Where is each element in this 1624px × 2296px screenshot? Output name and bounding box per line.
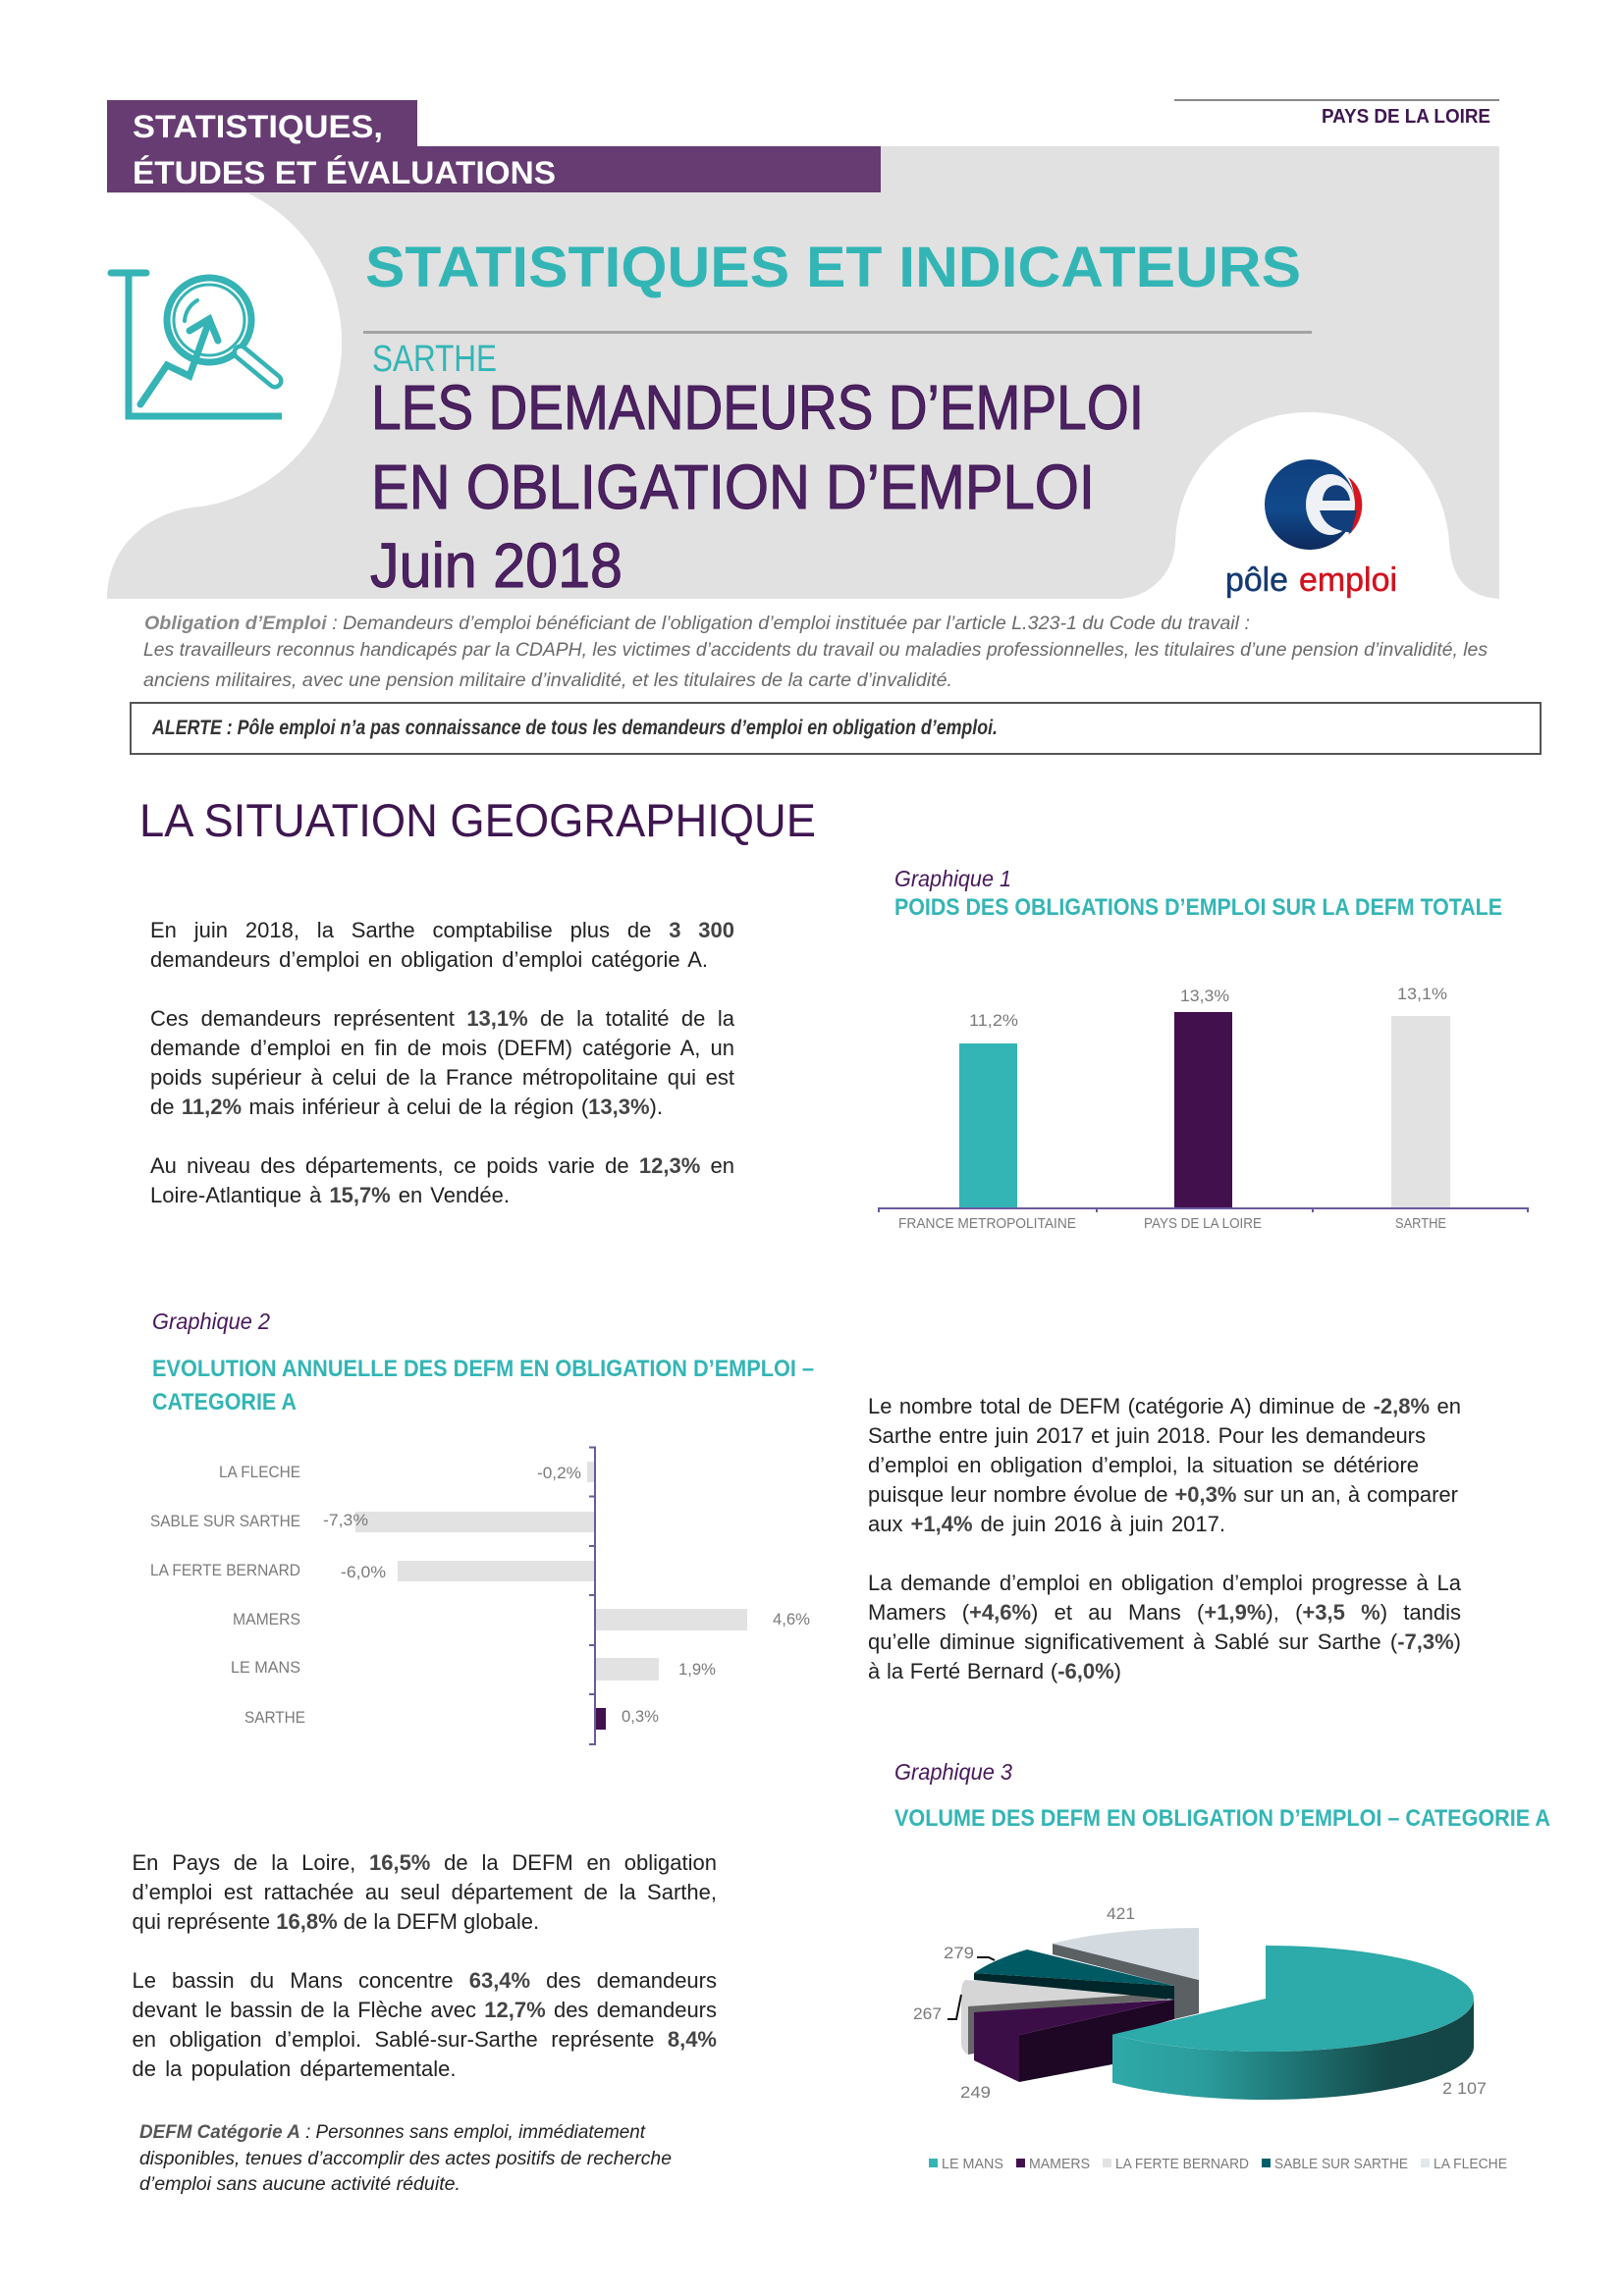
- chart heading: graphique 1: Graphique 1: [894, 866, 1011, 891]
- text block: situation: de 11,2% mais inférieur à celui de la région (13,3%).: [150, 1095, 663, 1119]
- bar chart: evolution annuelle: 1,9%: [678, 1660, 716, 1679]
- slice: la ferte bernard: [961, 1980, 1167, 2055]
- pie values: 2 107: [1442, 2079, 1487, 2098]
- bar chart: poids des obligations d'emploi: 13,1%: [1397, 985, 1447, 1003]
- text block: pays de la loire: devant le bassin de la Flèche avec 12,7% des demandeurs: [132, 1998, 717, 2022]
- definition: obligation d'emploi: Les travailleurs reconnus handicapés par la CDAPH, les victimes d’accidents du travail ou maladies professionnelles, les titulaires d’une pension d’invalidité, les: [143, 640, 1489, 661]
- slice: la fleche: [1053, 1928, 1199, 2019]
- definition: obligation d'emploi: [143, 614, 1489, 691]
- bar chart: poids des obligations d'emploi: [879, 985, 1528, 1232]
- bar chart: poids des obligations d'emploi: PAYS DE LA LOIRE: [1144, 1215, 1262, 1232]
- text block: evolution: puisque leur nombre évolue de +0,3% sur un an, à comparer: [868, 1482, 1458, 1507]
- alert box: [131, 703, 1541, 754]
- bar chart: evolution annuelle: 4,6%: [773, 1610, 810, 1629]
- top-right rule and region label: PAYS DE LA LOIRE: [1322, 106, 1490, 128]
- icon: chart with magnifying glass: [111, 273, 282, 416]
- bar chart: evolution annuelle: -6,0%: [341, 1563, 386, 1581]
- text block: evolution: d’emploi en obligation d’emploi, la situation se détériore: [868, 1453, 1419, 1477]
- text block: evolution: Mamers (+4,6%) et au Mans (+1,9%), (+3,5 %) tandis: [868, 1600, 1461, 1625]
- purple publication tag: STATISTIQUES,: [133, 109, 383, 144]
- text block: evolution: Le nombre total de DEFM (catégorie A) diminue de -2,8% en: [868, 1394, 1461, 1418]
- legend: [929, 2156, 1507, 2172]
- chart heading: graphique 1: POIDS DES OBLIGATIONS D’EMPLOI SUR LA DEFM TOTALE: [894, 894, 1502, 921]
- legend: LA FERTE BERNARD: [1115, 2156, 1249, 2172]
- title: statistiques et indicateurs: STATISTIQUES ET INDICATEURS: [365, 236, 1301, 299]
- text block: evolution: [868, 1394, 1461, 1683]
- text block: pays de la loire: d’emploi est rattachée au seul département de la Sarthe,: [132, 1880, 717, 1904]
- bar chart: poids des obligations d'emploi: 13,3%: [1180, 987, 1229, 1005]
- bar chart: evolution annuelle: [150, 1447, 810, 1744]
- text block: evolution: La demande d’emploi en obligation d’emploi progresse à La: [868, 1571, 1461, 1595]
- slice: sable sur sarthe: [974, 1949, 1174, 2000]
- definition: DEFM categorie A: disponibles, tenues d’accomplir des actes positifs de recherche: [139, 2149, 672, 2169]
- pie values: 421: [1107, 1904, 1135, 1923]
- bar chart: poids des obligations d'emploi: 11,2%: [969, 1011, 1018, 1030]
- chart heading: graphique 3: Graphique 3: [894, 1759, 1012, 1785]
- chart heading: graphique 2: CATEGORIE A: [152, 1389, 297, 1415]
- bar chart: evolution annuelle: MAMERS: [233, 1610, 300, 1629]
- text block: pays de la loire: qui représente 16,8% de la DEFM globale.: [132, 1909, 539, 1934]
- chart heading: graphique 3: [894, 1759, 1550, 1832]
- bar chart: evolution annuelle: -0,2%: [537, 1464, 581, 1482]
- main title: EN OBLIGATION D’EMPLOI: [371, 452, 1095, 522]
- text block: pays de la loire: en obligation d’emploi. Sablé-sur-Sarthe représente 8,4%: [132, 2027, 717, 2052]
- chart heading: graphique 1: [894, 866, 1502, 921]
- definition: DEFM categorie A: DEFM Catégorie A : Personnes sans emploi, immédiatement: [139, 2122, 646, 2143]
- bar chart: evolution annuelle: 0,3%: [622, 1707, 659, 1726]
- text block: pays de la loire: Le bassin du Mans concentre 63,4% des demandeurs: [132, 1968, 717, 1993]
- divider: [363, 331, 1312, 334]
- definition: DEFM categorie A: d’emploi sans aucune activité réduite.: [139, 2174, 460, 2195]
- header banner: grey background with cut-outs: [107, 146, 1499, 599]
- pie values: 267: [913, 2004, 942, 2023]
- legend: LA FLECHE: [1434, 2156, 1507, 2172]
- text block: situation: demandeurs d’emploi en obligation d’emploi catégorie A.: [150, 947, 708, 972]
- pie values: 279: [944, 1944, 974, 1962]
- text block: pays de la loire: En Pays de la Loire, 16,5% de la DEFM en obligation: [132, 1850, 717, 1875]
- logo: pole emploi: emploi: [1299, 561, 1397, 599]
- text block: evolution: aux +1,4% de juin 2016 à juin 2017.: [868, 1512, 1225, 1536]
- slice: mamers: [974, 2000, 1174, 2082]
- bar chart: poids des obligations d'emploi: FRANCE METROPOLITAINE: [898, 1215, 1076, 1232]
- main title: [370, 372, 1144, 601]
- definition: obligation d'emploi: Obligation d’Emploi : Demandeurs d’emploi bénéficiant de l’obligation d’emploi instituée par l’article L.323-1 du Code du travail :: [144, 614, 1250, 634]
- text block: situation: [150, 918, 734, 1207]
- bar chart: evolution annuelle: LA FERTE BERNARD: [150, 1561, 300, 1579]
- text block: evolution: qu’elle diminue significativement à Sablé sur Sarthe (-7,3%): [868, 1629, 1461, 1654]
- slice: le mans: [1112, 1946, 1474, 2100]
- text block: evolution: Sarthe entre juin 2017 et juin 2018. Pour les demandeurs: [868, 1423, 1426, 1448]
- text block: evolution: à la Ferté Bernard (-6,0%): [868, 1659, 1121, 1683]
- purple publication tag: [107, 100, 881, 192]
- text block: pays de la loire: [132, 1850, 717, 2081]
- main title: LES DEMANDEURS D’EMPLOI: [371, 372, 1144, 443]
- chart heading: graphique 3: VOLUME DES DEFM EN OBLIGATION D’EMPLOI – CATEGORIE A: [894, 1805, 1550, 1832]
- legend: LE MANS: [942, 2156, 1003, 2172]
- logo: pole emploi: [1225, 459, 1397, 599]
- purple publication tag: ÉTUDES ET ÉVALUATIONS: [133, 155, 556, 190]
- bar chart: poids des obligations d'emploi: SARTHE: [1395, 1215, 1446, 1232]
- text block: pays de la loire: de la population départementale.: [132, 2056, 456, 2081]
- legend: SABLE SUR SARTHE: [1274, 2156, 1408, 2172]
- bar chart: evolution annuelle: -7,3%: [323, 1511, 368, 1529]
- logo: pole emploi: pôle: [1225, 561, 1288, 599]
- main title: Juin 2018: [370, 530, 623, 601]
- text block: situation: Au niveau des départements, ce poids varie de 12,3% en: [150, 1153, 734, 1178]
- text block: situation: En juin 2018, la Sarthe comptabilise plus de 3 300: [150, 918, 734, 942]
- pie chart: volume des DEFM: [913, 1904, 1507, 2172]
- bar chart: evolution annuelle: SARTHE: [244, 1708, 305, 1727]
- chart heading: graphique 2: EVOLUTION ANNUELLE DES DEFM EN OBLIGATION D’EMPLOI –: [152, 1356, 814, 1382]
- section heading: LA SITUATION GEOGRAPHIQUE: [139, 794, 816, 846]
- text block: situation: demande d’emploi en fin de mois (DEFM) catégorie A, un: [150, 1036, 734, 1060]
- text block: situation: Loire-Atlantique à 15,7% en Vendée.: [150, 1183, 510, 1207]
- leader lines: [947, 1957, 995, 2019]
- definition: DEFM categorie A: [139, 2122, 672, 2195]
- bar chart: evolution annuelle: SABLE SUR SARTHE: [150, 1512, 300, 1530]
- chart heading: graphique 2: [152, 1308, 814, 1415]
- bar chart: evolution annuelle: LA FLECHE: [219, 1463, 300, 1481]
- legend: MAMERS: [1029, 2156, 1090, 2172]
- text block: situation: poids supérieur à celui de la France métropolitaine qui est: [150, 1065, 734, 1090]
- definition: obligation d'emploi: anciens militaires, avec une pension militaire d’invalidité, et les titulaires de la carte d’invalidité.: [143, 670, 952, 691]
- pie values: 249: [960, 2083, 991, 2102]
- chart heading: graphique 2: Graphique 2: [152, 1308, 270, 1334]
- pie values: [913, 1904, 1487, 2102]
- subtitle: sarthe: SARTHE: [372, 339, 497, 380]
- bar chart: evolution annuelle: LE MANS: [231, 1658, 300, 1677]
- alert box: ALERTE : Pôle emploi n’a pas connaissance de tous les demandeurs d’emploi en obligation d’emploi.: [151, 717, 998, 739]
- text block: situation: Ces demandeurs représentent 13,1% de la totalité de la: [150, 1006, 734, 1031]
